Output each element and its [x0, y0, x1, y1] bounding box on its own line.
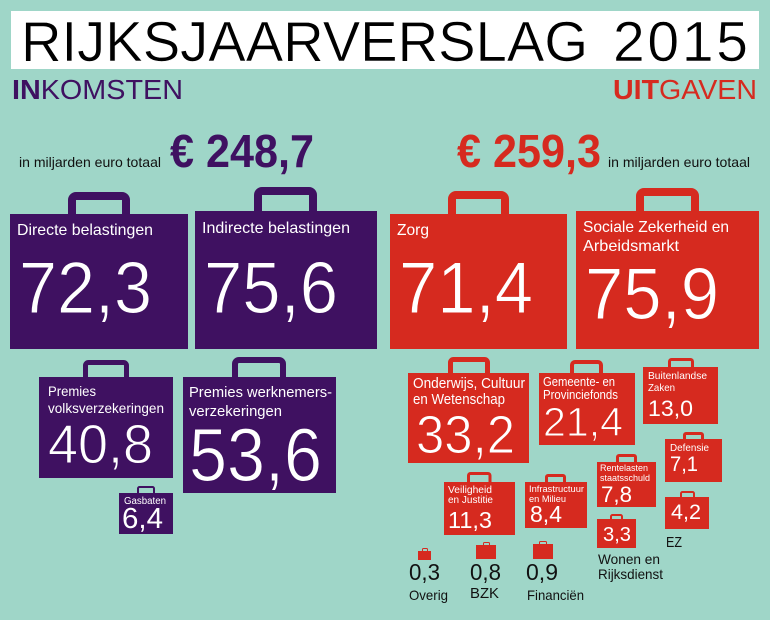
panel: Onderwijs, Cultuur en Wetenschap: 33,2 — [416, 405, 515, 465]
panel: Sociale Zekerheid en Arbeidsmarkt: 75,9 — [585, 254, 719, 335]
panel: Rentelasten staatsschuld: Rentelasten — [600, 463, 648, 474]
panel: Premies volksverzekeringen: Premies — [48, 383, 96, 399]
panel: Gemeente- en Provinciefonds: Gemeente- en — [543, 374, 615, 389]
panel: EZ: 4,2 — [671, 501, 701, 524]
title: 2015 — [613, 10, 748, 74]
panel: Financiën — [526, 542, 584, 603]
panel: Indirecte belastingen: 75,6 — [204, 248, 338, 329]
panel: Infrastructuur en Milieu — [525, 476, 587, 528]
title: RIJKSJAARVERSLAG — [21, 10, 588, 74]
heading: uitgaven: UITGAVEN — [613, 74, 757, 105]
label: Wonen en Rijksdienst — [598, 551, 663, 582]
panel: Financiën: Financiën — [527, 587, 584, 603]
panel: Premies werknemersverzekeringen: 53,6 — [189, 413, 322, 497]
panel: Indirecte belastingen: Indirecte belastingen — [202, 220, 350, 237]
panel: Gemeente- en Provinciefonds: 21,4 — [543, 399, 623, 445]
panel: Gasbaten: 6,4 — [122, 503, 163, 535]
panel: Rentelasten staatsschuld — [597, 456, 656, 507]
panel: Buitenlandse Zaken: Zaken — [648, 382, 675, 394]
panel: Premies werknemersverzekeringen: verzekeringen — [189, 403, 282, 420]
panel: Onderwijs, Cultuur en Wetenschap: Onderwijs, Cultuur — [413, 375, 525, 392]
panel: Buitenlandse Zaken: Buitenlandse — [648, 370, 707, 382]
panel: Premies werknemersverzekeringen: Premies werknemers- — [189, 384, 332, 401]
panel: Defensie — [665, 434, 722, 482]
heading: inkomsten: INKOMSTEN — [12, 74, 183, 105]
panel: Gemeente- en Provinciefonds — [539, 362, 635, 445]
panel: Onderwijs, Cultuur en Wetenschap: en Wetenschap — [413, 391, 505, 408]
panel: Zorg — [390, 195, 567, 349]
panel: Wonen en Rijksdienst — [597, 515, 636, 548]
panel: Indirecte belastingen — [195, 191, 377, 349]
panel: Sociale Zekerheid en Arbeidsmarkt: Arbeidsmarkt — [583, 238, 680, 255]
label: EZ: EZ — [666, 534, 682, 551]
panel: BZK: BZK — [470, 585, 499, 602]
label: Wonen en Rijksdienst: Wonen en — [598, 551, 660, 567]
note: uitgaven unit: in miljarden euro totaal — [608, 154, 750, 170]
panel: BZK — [470, 542, 501, 602]
panel: Defensie: Defensie — [670, 442, 709, 454]
panel: Buitenlandse Zaken — [643, 360, 718, 424]
panel: Overig: 0,3 — [409, 559, 440, 585]
panel: Overig: Overig — [409, 587, 448, 603]
panel: Directe belastingen — [10, 196, 188, 349]
panel: Zorg: Zorg — [397, 222, 429, 239]
panel: Premies volksverzekeringen: 40,8 — [48, 413, 153, 475]
panel: Infrastructuur en Milieu: en Milieu — [529, 494, 566, 505]
panel: Rentelasten staatsschuld: staatsschuld — [600, 473, 650, 484]
total: inkomsten: € 248,7 — [170, 125, 314, 177]
panel: Zorg: 71,4 — [399, 248, 533, 329]
panel: Overig — [409, 548, 448, 603]
panel: Wonen en Rijksdienst: 3,3 — [603, 524, 631, 546]
panel: Infrastructuur en Milieu: 8,4 — [530, 501, 562, 527]
panel: Premies werknemersverzekeringen — [183, 360, 336, 497]
panel: Gasbaten — [119, 487, 173, 535]
panel: EZ — [665, 492, 709, 529]
panel: Veiligheid en Justitie — [444, 474, 515, 535]
panel: Defensie: 7,1 — [670, 453, 698, 476]
panel: Veiligheid en Justitie: 11,3 — [448, 507, 492, 533]
panel: Sociale Zekerheid en Arbeidsmarkt — [576, 192, 759, 349]
panel: Onderwijs, Cultuur en Wetenschap — [408, 360, 529, 465]
panel: Rentelasten staatsschuld: 7,8 — [601, 482, 632, 507]
total: uitgaven: € 259,3 — [457, 125, 601, 177]
panel: BZK: 0,8 — [470, 559, 501, 585]
panel: Directe belastingen: Directe belastingen — [17, 222, 153, 239]
panel: Buitenlandse Zaken: 13,0 — [648, 396, 693, 421]
panel: Premies volksverzekeringen: volksverzekeringen — [48, 400, 164, 416]
panel: Gasbaten: Gasbaten — [124, 496, 166, 507]
panel: Gemeente- en Provinciefonds: Provinciefonds — [543, 387, 618, 402]
panel: Financiën: 0,9 — [526, 559, 558, 585]
panel: Veiligheid en Justitie: en Justitie — [448, 495, 493, 506]
panel: Infrastructuur en Milieu: Infrastructuur — [529, 484, 584, 495]
panel: Sociale Zekerheid en Arbeidsmarkt: Sociale Zekerheid en — [583, 219, 729, 236]
panel: Premies volksverzekeringen — [39, 362, 173, 478]
note: inkomsten unit: in miljarden euro totaal — [19, 154, 161, 170]
panel: Directe belastingen: 72,3 — [19, 248, 152, 329]
label: Wonen en Rijksdienst: Rijksdienst — [598, 566, 663, 582]
panel: Veiligheid en Justitie: Veiligheid — [448, 485, 492, 496]
